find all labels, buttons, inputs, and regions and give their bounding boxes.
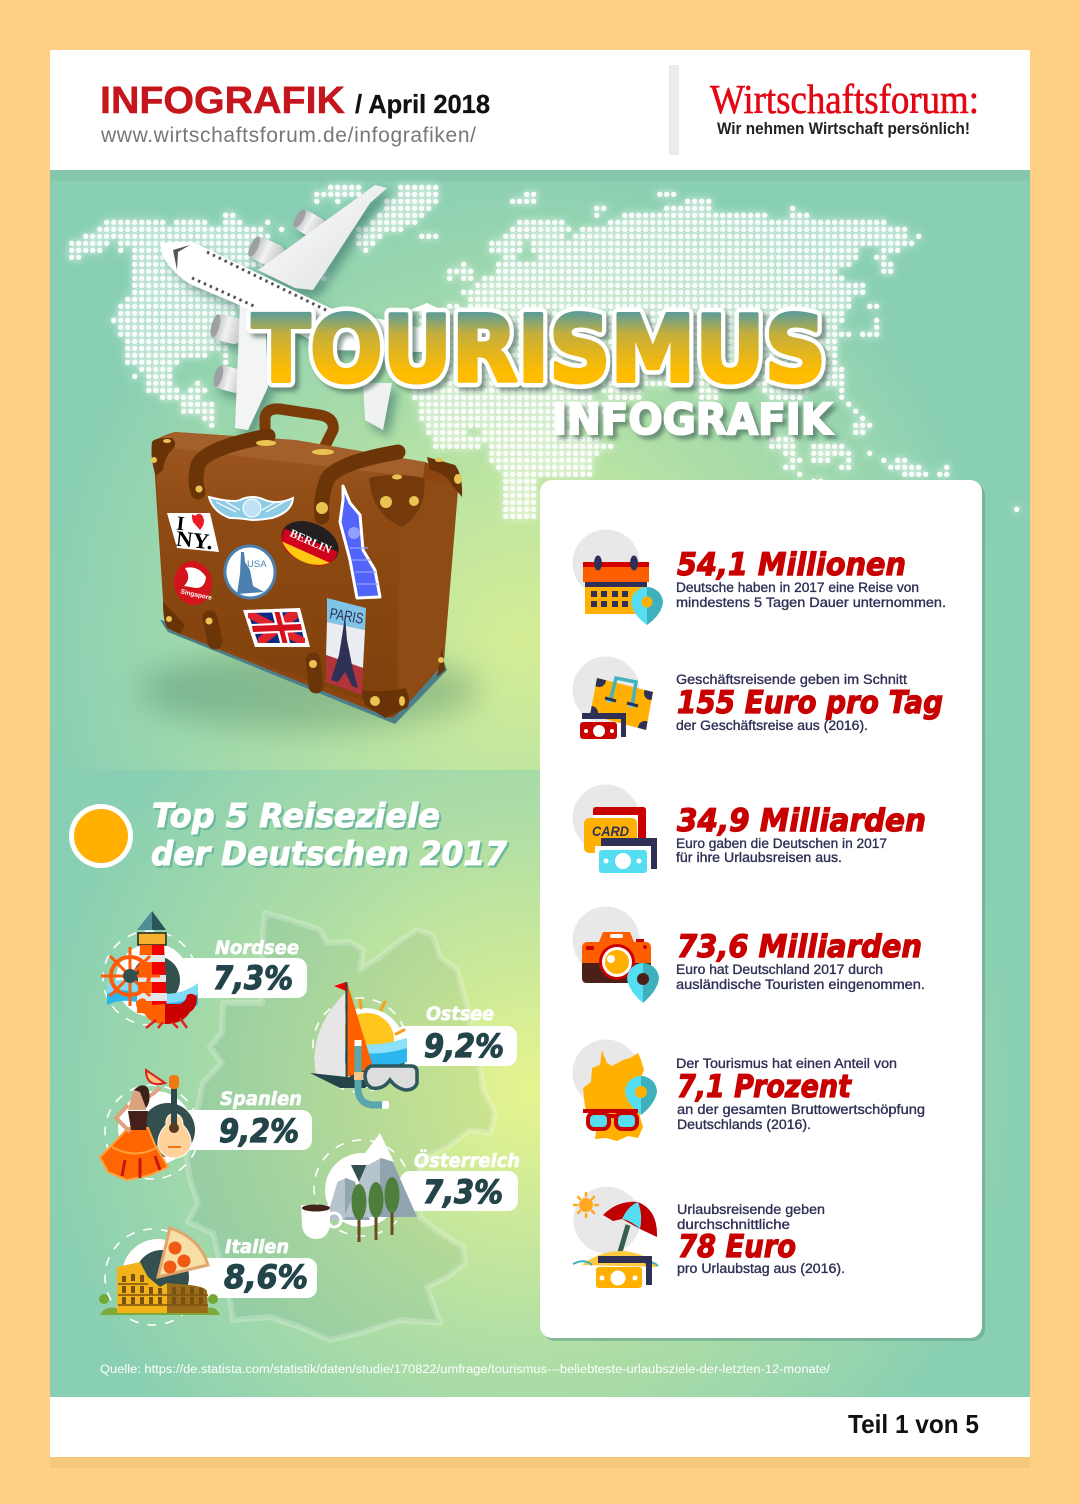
label: Italien xyxy=(225,1236,289,1258)
icon: mountains xyxy=(326,1133,417,1220)
body text: ausländische Touristen eingenommen. xyxy=(676,977,925,992)
headline: 155 Euro pro Tag xyxy=(677,685,943,721)
value: 7,3% xyxy=(423,1173,503,1211)
icon: sun xyxy=(340,1000,404,1067)
body text: Deutschlands (2016). xyxy=(677,1117,811,1132)
value: 9,2% xyxy=(424,1027,504,1065)
heading Top 5: der Deutschen 2017 xyxy=(153,836,509,875)
icon: pizza xyxy=(158,1228,208,1277)
body text: pro Urlaubstag aus (2016). xyxy=(677,1261,845,1276)
sticker: Berlin xyxy=(274,513,346,573)
label: Spanien xyxy=(220,1088,302,1110)
intro text: durchschnittliche xyxy=(677,1217,790,1232)
icon: lighthouse xyxy=(137,911,167,1013)
title TOURISMUS: TOURISMUS xyxy=(252,296,826,403)
destination: Nordsee xyxy=(101,911,307,1028)
straps xyxy=(196,436,398,686)
sticker: Berlin: BERLIN xyxy=(288,528,334,557)
header url: www.wirtschaftsforum.de/infografiken/ xyxy=(100,124,476,147)
headline: 54,1 Millionen xyxy=(677,547,906,583)
body text xyxy=(677,1102,925,1132)
gold rivets xyxy=(151,439,462,706)
icon: sailboat xyxy=(310,982,375,1088)
subtitle INFOGRAFIK: INFOGRAFIK xyxy=(552,395,834,445)
headline: 34,9 Milliarden xyxy=(677,803,926,839)
dotted world map xyxy=(72,187,1017,516)
body text: Euro gaben die Deutschen in 2017 xyxy=(676,836,887,851)
icon: dancer xyxy=(100,1070,168,1180)
intro text xyxy=(677,1202,825,1232)
logo wordmark: Wirtschaftsforum: xyxy=(710,76,979,122)
icon: camera xyxy=(572,906,659,1003)
value: 8,6% xyxy=(224,1258,308,1296)
sticker: Singapore: Singapore xyxy=(180,588,213,602)
icon: suitcase and money xyxy=(572,656,658,739)
icon: credit card and money: CARD xyxy=(592,823,629,839)
suitcase xyxy=(140,409,480,730)
tail fin xyxy=(363,383,392,430)
icon: coffee cup xyxy=(301,1204,341,1239)
sticker: I love NY: I xyxy=(175,513,186,535)
icon: credit card and money xyxy=(572,784,657,873)
value: 9,2% xyxy=(219,1112,299,1150)
fact 2 xyxy=(572,656,943,739)
sticker: wings xyxy=(209,497,293,520)
cockpit xyxy=(173,245,190,270)
icon: beach umbrella and money xyxy=(573,1186,658,1288)
body text: mindestens 5 Tagen Dauer unternommen. xyxy=(676,595,946,610)
airplane xyxy=(160,185,442,430)
sticker: I love NY: NY. xyxy=(175,526,214,554)
corner caps xyxy=(152,438,462,718)
intro text: Urlaubsreisende geben xyxy=(677,1202,825,1217)
logo tagline: Wir nehmen Wirtschaft persönlich! xyxy=(717,119,970,138)
upper tail xyxy=(405,303,442,312)
heading bullet xyxy=(69,804,133,868)
icon: crab xyxy=(136,994,197,1028)
header title: INFOGRAFIK xyxy=(100,80,346,122)
destination: Italien xyxy=(99,1228,317,1325)
body text xyxy=(676,836,887,865)
body text: Euro hat Deutschland 2017 durch xyxy=(676,962,883,977)
fact 4 xyxy=(572,906,925,1003)
label: Österreich xyxy=(414,1148,520,1172)
value: 7,3% xyxy=(213,959,293,997)
fact 5 xyxy=(572,1040,925,1141)
headline: 7,1 Prozent xyxy=(677,1069,852,1105)
body text: an der gesamten Bruttowertschöpfung xyxy=(677,1102,925,1117)
sticker: USA: USA xyxy=(247,559,267,570)
cabin windows xyxy=(192,252,330,312)
upper background panel xyxy=(50,181,1030,770)
headline: 78 Euro xyxy=(678,1229,796,1265)
footer bar xyxy=(50,1397,1030,1468)
intro text: Der Tourismus hat einen Anteil von xyxy=(676,1056,897,1071)
fuselage xyxy=(160,242,430,352)
icon: ship wheel xyxy=(101,947,160,1006)
Germany map outline xyxy=(187,913,495,1340)
label: Nordsee xyxy=(215,937,299,959)
destination: Spanien xyxy=(100,1070,312,1180)
icon: fan xyxy=(146,1070,165,1084)
heading Top 5 xyxy=(151,796,509,875)
lower wing xyxy=(235,305,268,430)
icon: waves xyxy=(107,980,198,1010)
intro text: Geschäftsreisende geben im Schnitt xyxy=(676,672,907,687)
icon: colosseum xyxy=(117,1262,208,1313)
icon: waves xyxy=(340,1038,407,1078)
icon: diving mask xyxy=(354,1066,417,1090)
heading Top 5: Top 5 Reiseziele xyxy=(154,798,442,837)
upper engines xyxy=(246,207,328,270)
suitcase body xyxy=(153,432,458,718)
icon: calendar xyxy=(572,530,663,625)
heading Top 5: Top 5 Reiseziele xyxy=(152,796,440,835)
source line: Quelle: https://de.statista.com/statistik/daten/studie/170822/umfrage/tourismus---beliebteste-urlaubsziele-der-letzten-12-monate/ xyxy=(100,1364,831,1376)
page counter: Teil 1 von 5 xyxy=(848,1409,979,1439)
sticker: UK flag xyxy=(243,608,310,647)
icon: guitar xyxy=(158,1075,191,1158)
header bar xyxy=(50,50,1030,170)
fact 1 xyxy=(572,530,946,625)
sticker: Paris xyxy=(326,598,366,695)
sticker: Singapore xyxy=(171,559,215,607)
sticker: Big Ben xyxy=(340,486,380,598)
lower engines xyxy=(208,312,248,395)
handle xyxy=(265,409,333,450)
fact 6 xyxy=(573,1186,845,1288)
destination: Österreich xyxy=(301,1133,520,1242)
heading Top 5: der Deutschen 2017 xyxy=(151,834,507,873)
icon: grass xyxy=(100,1308,220,1315)
facts panel xyxy=(540,480,985,1341)
body text: der Geschäftsreise aus (2016). xyxy=(676,718,868,733)
icon: Germany with sunglasses xyxy=(572,1040,657,1141)
upper wing xyxy=(258,185,387,290)
fact 3 xyxy=(572,784,926,873)
sticker: USA xyxy=(221,542,279,602)
sticker: Paris: PARIS xyxy=(328,605,365,628)
header date: / April 2018 xyxy=(355,89,490,119)
lower background panel xyxy=(50,770,1030,1397)
body text xyxy=(676,580,946,610)
icon: snorkel xyxy=(354,1040,389,1109)
title TOURISMUS: TOURISMUS xyxy=(252,296,826,403)
headline: 73,6 Milliarden xyxy=(677,929,922,965)
body text: Deutsche haben in 2017 eine Reise von xyxy=(676,580,919,595)
body text xyxy=(676,962,925,992)
sticker: I love NY xyxy=(167,513,219,554)
body text: für ihre Urlaubsreisen aus. xyxy=(676,850,842,865)
label: Ostsee xyxy=(426,1003,494,1025)
destination: Ostsee xyxy=(310,982,517,1109)
icon: trees xyxy=(352,1177,400,1242)
